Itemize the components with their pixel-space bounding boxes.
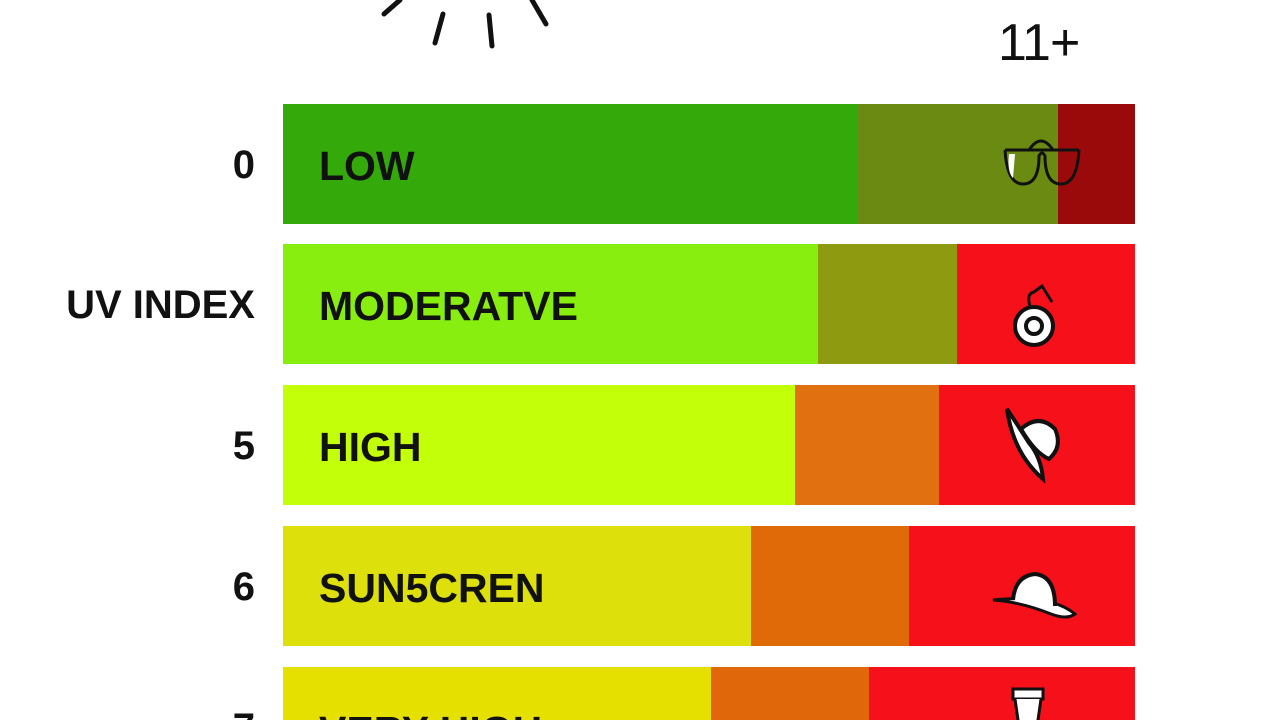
bar: low: LOW bbox=[319, 143, 415, 189]
icon: sunglasses bbox=[1004, 140, 1080, 186]
bar: low bbox=[283, 104, 1135, 224]
bar: sunscreen bbox=[283, 526, 1135, 646]
bar: very high bbox=[283, 667, 1135, 720]
icon: sun rays bbox=[382, 0, 548, 48]
scale label UV INDEX: UV INDEX bbox=[66, 283, 255, 327]
scale label 0: 0 bbox=[233, 143, 255, 187]
scale label 6: 6 bbox=[233, 565, 255, 609]
bar: moderate: MODERATVE bbox=[319, 283, 578, 329]
text: 11+: 11+ bbox=[998, 14, 1079, 72]
icon: hat bbox=[1005, 408, 1060, 484]
scale label 5: 5 bbox=[233, 424, 255, 468]
icon: sun hat bbox=[992, 572, 1077, 618]
icon: sunscreen cap bbox=[1013, 284, 1055, 347]
bar: sunscreen: SUN5CREN bbox=[319, 565, 545, 611]
icon: sunscreen bottle bbox=[1012, 688, 1044, 720]
bar: high: HIGH bbox=[319, 424, 422, 470]
bar: moderate bbox=[283, 244, 1135, 364]
bar: high bbox=[283, 385, 1135, 505]
